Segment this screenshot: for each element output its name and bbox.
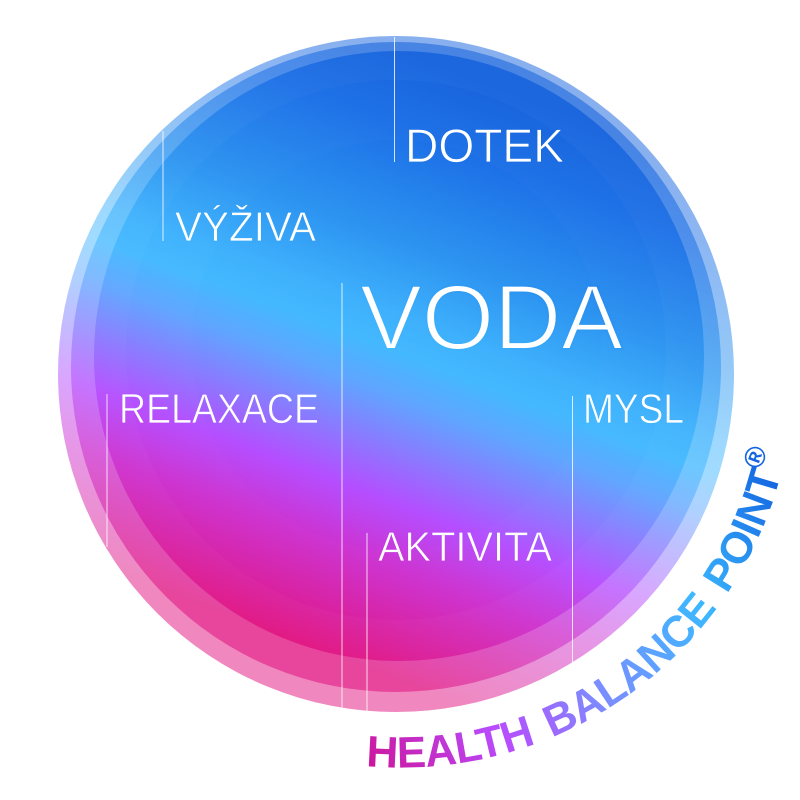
divider lines [107, 37, 572, 711]
label: VÝŽIVA: VÝŽIVA [175, 203, 316, 250]
registered mark: ® [737, 442, 775, 473]
label: VODA: VODA [360, 267, 624, 369]
curved brand text: HEALTH BALANCE POINT: HEALTH BALANCE POINT [368, 465, 778, 768]
label: AKTIVITA: AKTIVITA [378, 523, 552, 570]
label: RELAXACE: RELAXACE [119, 385, 319, 432]
label: MYSL: MYSL [583, 385, 684, 432]
sphere: layered gradient circles [58, 36, 734, 712]
label: DOTEK: DOTEK [405, 119, 564, 172]
